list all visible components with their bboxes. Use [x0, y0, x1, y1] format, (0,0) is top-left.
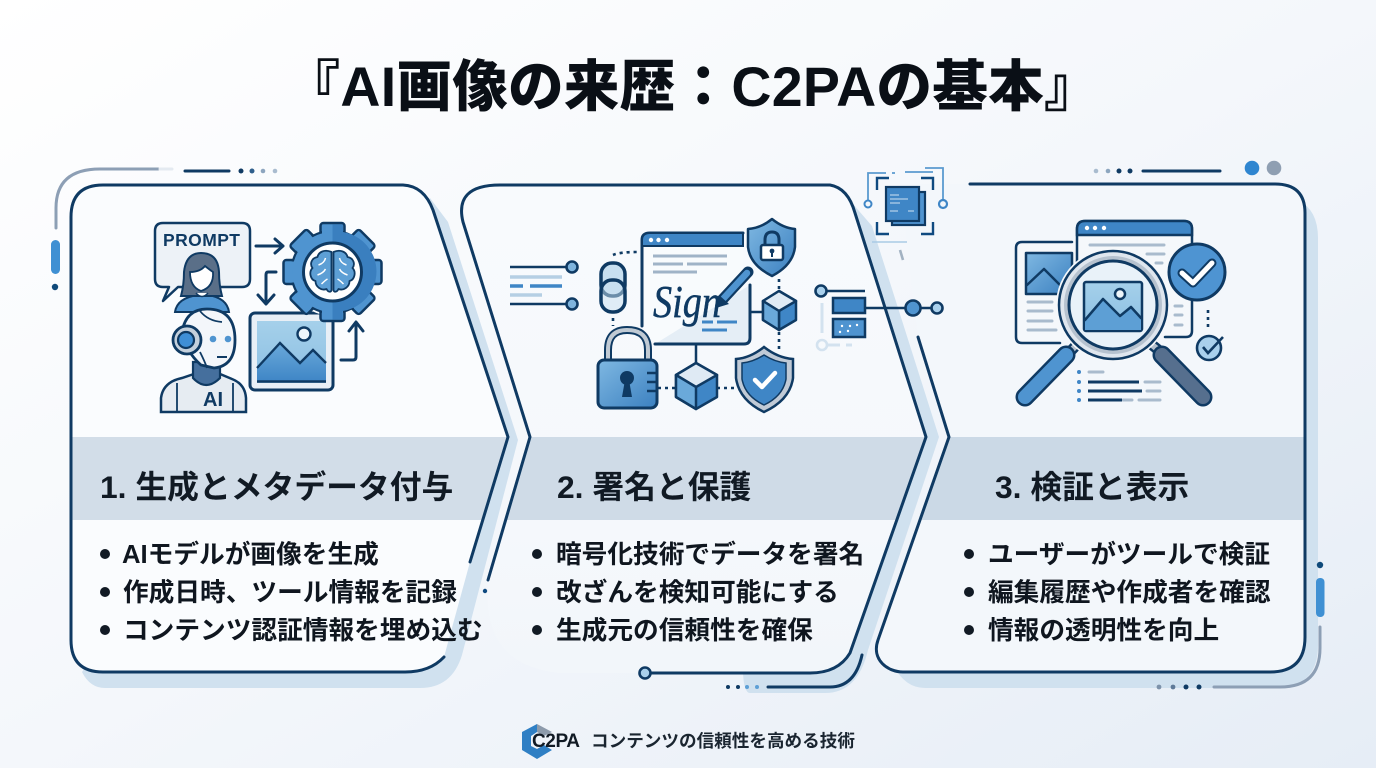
panel 2 bullets [532, 539, 864, 645]
panel 1 body [71, 185, 508, 672]
panel 3 outline [876, 184, 1305, 672]
panel 1 bullets: AIモデルが画像を生成 [122, 539, 379, 569]
shield with padlock [748, 219, 795, 276]
panel 2 bullets: 改ざんを検知可能にする [556, 577, 839, 607]
signature: Sign [653, 276, 721, 327]
panel 2 outline [462, 185, 926, 673]
right circuit block [816, 286, 942, 350]
panel 2 heading band [506, 437, 926, 520]
panel 3: verification and display [876, 184, 1318, 688]
magnifier lens [1056, 248, 1170, 362]
gear with brain [284, 223, 382, 321]
check badge [1169, 244, 1225, 300]
generated image [250, 313, 333, 390]
accent: panel 2 lead dot [483, 589, 487, 593]
arrow: gear to image [258, 272, 276, 304]
panel 1 heading: 1. 生成とメタデータ付与 [100, 469, 453, 505]
icon: magnifier over documents [1016, 221, 1225, 402]
robot [161, 309, 246, 412]
decoration: top-right accent [1094, 161, 1281, 175]
panel 3 bullets: 編集履歴や作成者を確認 [988, 578, 1271, 607]
result list [1077, 370, 1081, 374]
prompt speech bubble [155, 223, 250, 301]
padlock [598, 330, 657, 408]
shield with check [736, 347, 793, 412]
panel 3 heading: 3. 検証と表示 [995, 469, 1189, 505]
arrow: prompt to gear [256, 239, 283, 253]
panel 2 bullets: 暗号化技術でデータを署名 [556, 539, 864, 569]
brain [310, 251, 355, 292]
icon: AI generation flow: PROMPT [163, 230, 240, 250]
panel 3 body [876, 184, 1305, 672]
panel 3 bullets: 情報の透明性を向上 [988, 616, 1219, 645]
panel 2 heading: 2. 署名と保護 [557, 469, 751, 505]
panel 3 bullets [964, 539, 1271, 645]
icon: AI generation flow [155, 223, 382, 412]
panel 2 lower accent line and dots [726, 655, 862, 689]
right cube [763, 291, 796, 330]
panel 2 connector ring [640, 668, 650, 678]
robot: AI [203, 389, 223, 411]
chain link [601, 263, 625, 296]
panel 1 heading band [72, 437, 508, 520]
panel 1 bullets [100, 539, 483, 645]
decoration: bottom-right accent [1157, 562, 1324, 690]
panel 2 body [462, 185, 926, 673]
panel 1 outline [71, 185, 508, 672]
C2PA hexagon logo [522, 724, 552, 759]
title: 『AI画像の来歴：C2PAの基本』 [284, 56, 1100, 118]
footer tagline: コンテンツの信頼性を高める技術 [591, 731, 855, 751]
left document [1016, 242, 1072, 343]
magnifier handles [1067, 335, 1086, 355]
panel 2 shadow [743, 204, 939, 693]
person [175, 253, 229, 312]
panel 1: generation and metadata [71, 185, 518, 688]
browser window [1077, 221, 1192, 337]
panel 1 bullets: コンテンツ認証情報を埋め込む [123, 616, 483, 645]
floating document icon [864, 168, 947, 260]
panel 1 shadow [82, 198, 518, 688]
panel 3 bullets: ユーザーがツールで検証 [988, 539, 1270, 569]
bottom cube [676, 363, 717, 409]
panel 2 bullets: 生成元の信頼性を確保 [556, 616, 813, 645]
decoration: top-left accent [51, 168, 277, 290]
panel 2: signing and protection [51, 161, 1324, 759]
arrow: image to gear [341, 322, 363, 360]
signed document [642, 233, 743, 344]
C2PA wordmark: C2PA [532, 731, 580, 752]
left circuit lines [510, 267, 567, 304]
icon: signature and security [510, 168, 947, 412]
panel 1 bullets: 作成日時、ツール情報を記録 [123, 578, 457, 607]
footer [522, 724, 855, 759]
pen [716, 272, 748, 308]
panel 3 shadow [893, 200, 1318, 688]
panel 3 heading band [920, 437, 1304, 520]
